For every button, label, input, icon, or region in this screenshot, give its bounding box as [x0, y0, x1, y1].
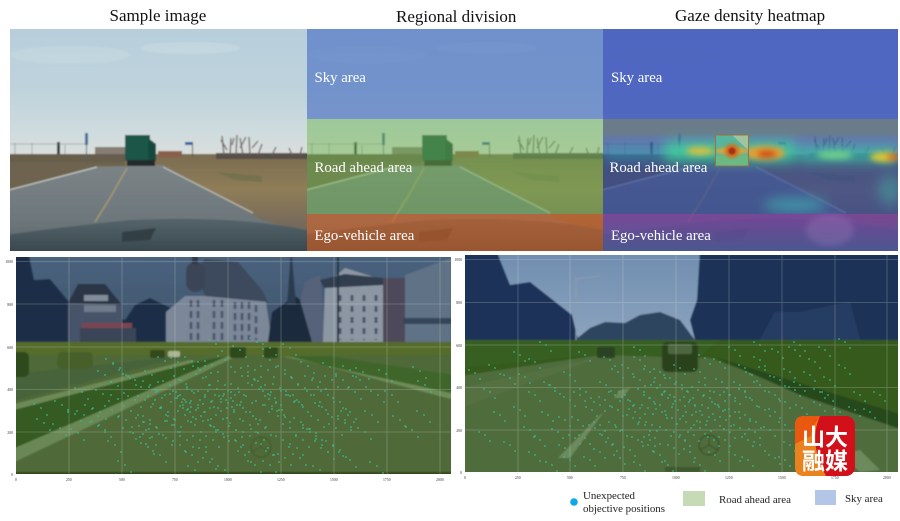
axis tick labels: right plot: 1000 [454, 258, 462, 262]
axis tick labels: right plot: 250 [515, 476, 521, 480]
label: ego-vehicle area: Ego-vehicle area [314, 228, 415, 244]
label: ego-vehicle area: Ego-vehicle area [611, 228, 711, 244]
axis tick labels: right plot: 1000 [672, 476, 680, 480]
axis tick labels: left plot: 500 [119, 478, 125, 482]
axis tick labels: left plot: 0 [11, 473, 13, 477]
axis tick labels: left plot: 400 [7, 388, 13, 392]
axis tick labels: right plot: 500 [567, 476, 573, 480]
heat: upper road band [603, 119, 898, 138]
grid lines [465, 255, 898, 472]
title: sample image: Sample image [110, 6, 206, 25]
label: road ahead area: Road ahead area [314, 160, 413, 176]
heat: road region base [603, 119, 898, 214]
panel: right road scatter plot [460, 250, 900, 475]
label: road ahead area: Road ahead area [610, 160, 708, 176]
legend: sky label: Sky area [845, 493, 883, 505]
scatter: unexpected objective positions [469, 339, 885, 471]
region: ego-vehicle overlay [307, 214, 603, 251]
axis tick labels: left plot: 200 [7, 431, 13, 435]
axis tick labels: left plot: 1000 [224, 478, 232, 482]
axis tick labels: left plot: 1500 [330, 478, 338, 482]
axis tick labels: right plot: 1750 [831, 476, 839, 480]
logo: 山大融媒: 山大 [802, 418, 848, 452]
legend: unexpected objective positions marker [570, 498, 578, 506]
axis tick labels: left plot: 1750 [383, 478, 391, 482]
axis tick labels: right plot: 0 [464, 476, 466, 480]
panel: left street scatter plot [10, 250, 455, 477]
logo: 山大融媒 [795, 416, 855, 476]
axis tick labels: left plot: 600 [7, 346, 13, 350]
grid lines [16, 257, 451, 474]
axis tick labels: right plot: 750 [620, 476, 626, 480]
logo: 山大融媒: 融媒 [802, 442, 848, 476]
heat: gaze streak [595, 110, 900, 212]
legend: unexpected objective positions label: Unexpected [583, 490, 636, 502]
label: sky area: Sky area [611, 70, 663, 86]
axis tick labels: left plot [5, 260, 444, 482]
region: sky overlay [307, 29, 603, 119]
panel: regional division [302, 24, 609, 256]
axis tick labels: right plot: 600 [456, 344, 462, 348]
axis tick labels: right plot [454, 258, 891, 480]
axis tick labels: left plot: 1000 [5, 260, 13, 264]
title: gaze density heatmap: Gaze density heatmap [675, 6, 825, 25]
heat: ego-vehicle region [603, 214, 898, 251]
axis tick labels: left plot: 250 [66, 478, 72, 482]
axis tick labels: left plot: 2000 [436, 478, 444, 482]
heat: centre box [715, 135, 749, 166]
heat: sky region [603, 29, 898, 119]
region: road ahead overlay [307, 119, 603, 214]
legend [570, 490, 883, 515]
axis tick labels: right plot: 200 [456, 429, 462, 433]
panel: gaze density heatmap [595, 24, 900, 256]
axis tick labels: left plot: 1250 [277, 478, 285, 482]
legend: road ahead label: Road ahead area [719, 494, 791, 506]
axis tick labels: right plot: 2000 [883, 476, 891, 480]
axis tick labels: right plot: 0 [460, 471, 462, 475]
legend: unexpected objective positions label: objective positions [583, 503, 665, 515]
axis tick labels: right plot: 400 [456, 386, 462, 390]
axis tick labels: left plot: 800 [7, 303, 13, 307]
legend: sky swatch [815, 490, 836, 505]
axis tick labels: left plot: 750 [172, 478, 178, 482]
scatter: unexpected objective positions [34, 338, 431, 477]
label: sky area: Sky area [314, 70, 366, 86]
panel: sample image [5, 24, 312, 256]
axis tick labels: right plot: 1500 [778, 476, 786, 480]
title: regional division: Regional division [396, 7, 517, 26]
axis tick labels: right plot: 800 [456, 301, 462, 305]
legend: road ahead swatch [683, 491, 705, 506]
axis tick labels: left plot: 0 [15, 478, 17, 482]
axis tick labels: right plot: 1250 [725, 476, 733, 480]
